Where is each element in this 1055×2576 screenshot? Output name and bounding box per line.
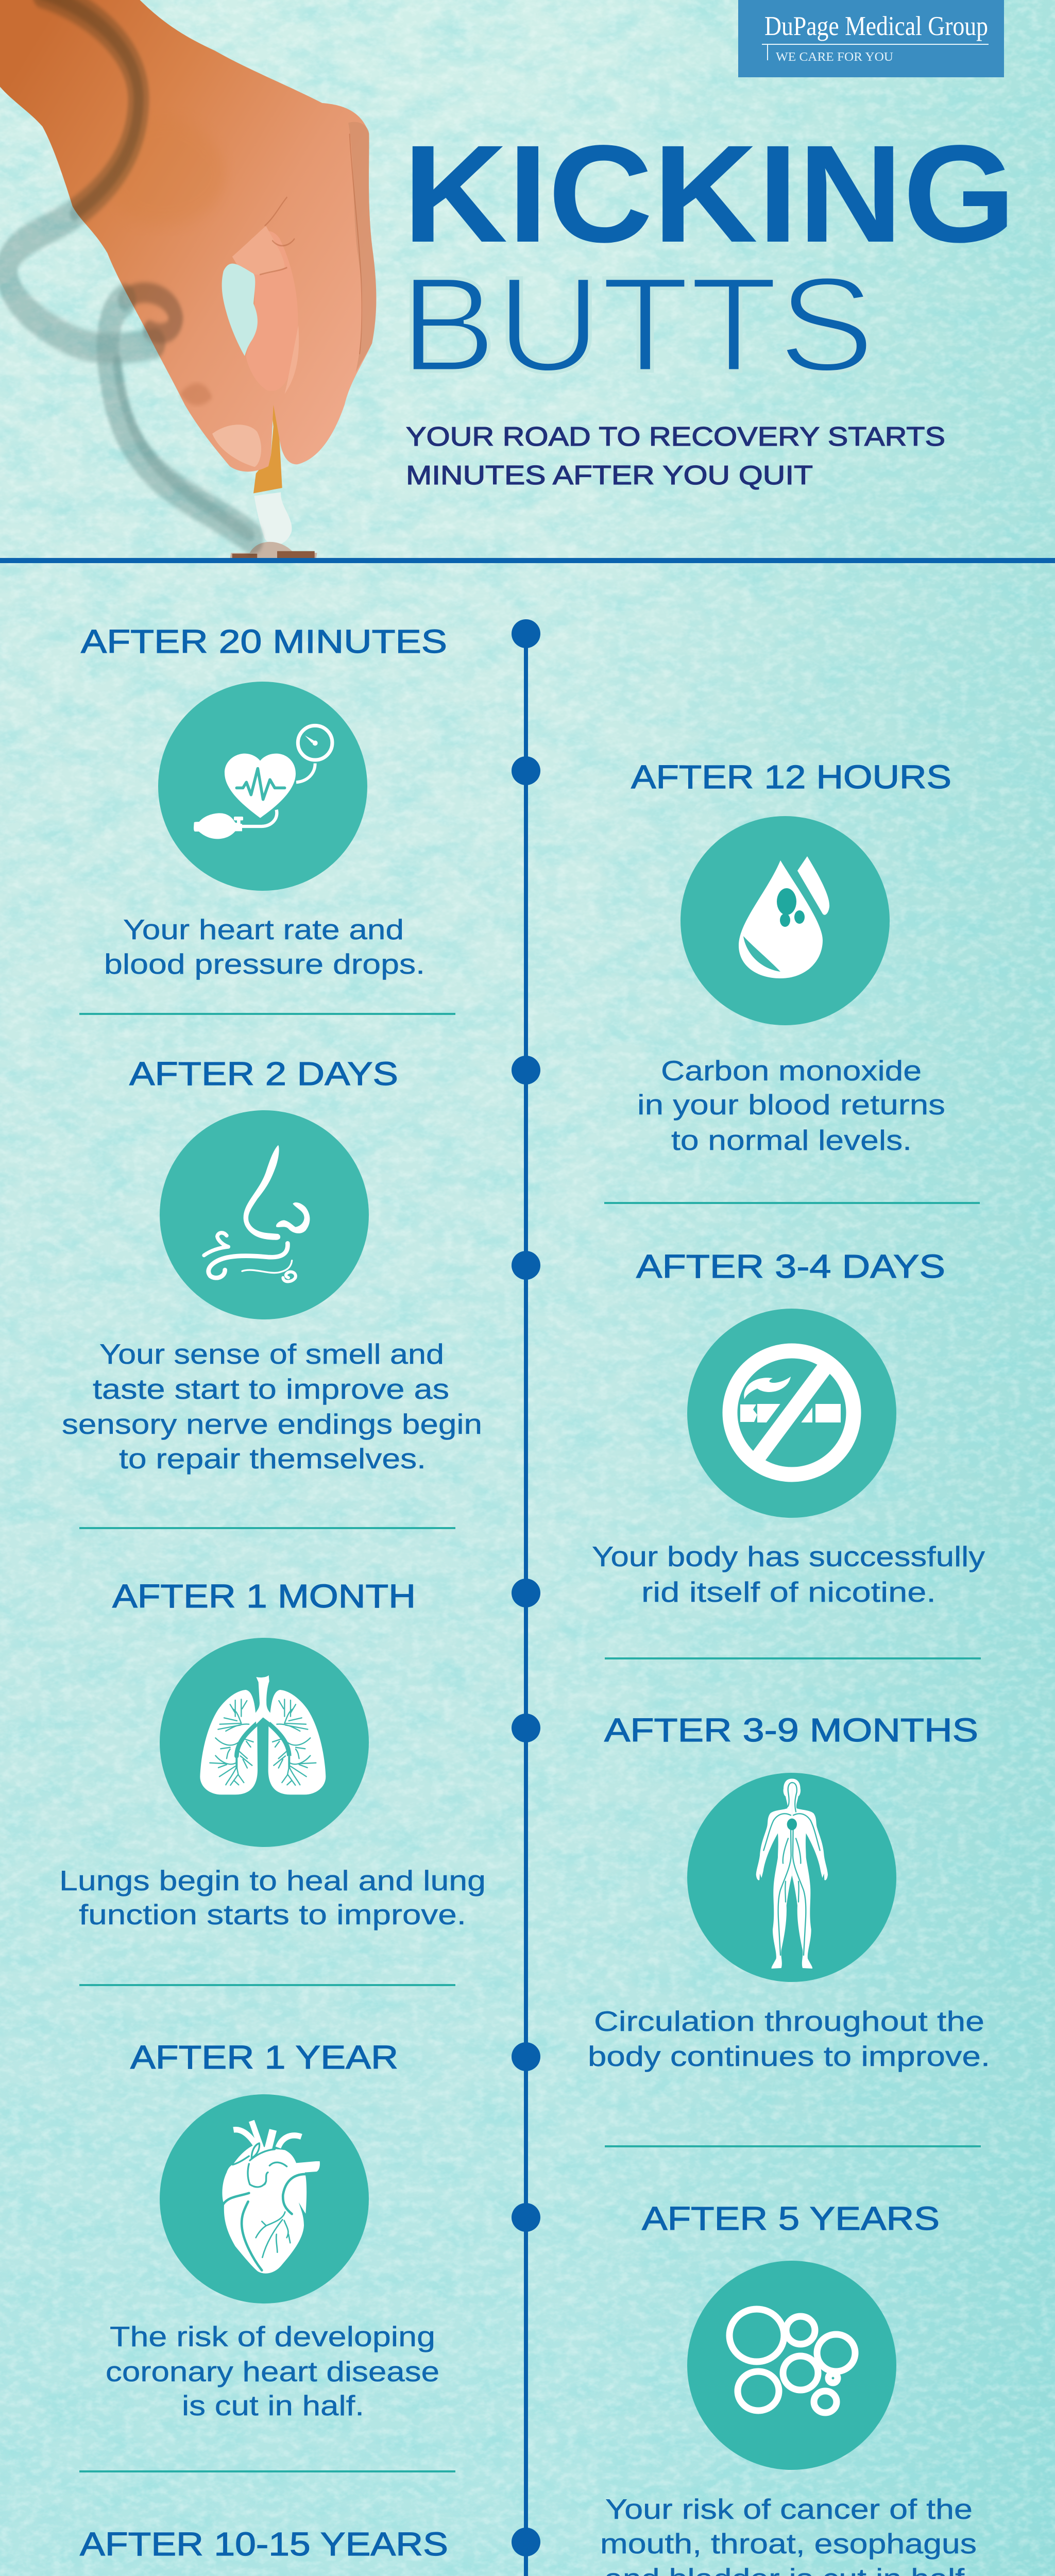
description: [62, 1338, 482, 1475]
hero panel: [0, 0, 1055, 563]
title: kicking: KICKING: [403, 116, 1016, 272]
description: rid itself of nicotine.: [641, 1576, 936, 1608]
description: Carbon monoxide: [661, 1055, 922, 1087]
description: [588, 2005, 990, 2072]
title: butts: BUTTS: [400, 249, 875, 400]
icon: anatomical heart: [160, 2094, 369, 2303]
description: Your sense of smell and: [99, 1338, 444, 1370]
logo tagline: WE CARE FOR YOU: [776, 50, 893, 64]
heading: AFTER 10-15 YEARS: [80, 2526, 448, 2563]
description: mouth, throat, esophagus: [600, 2528, 977, 2560]
panel: after 2 days: [62, 1055, 482, 1475]
subtitle: YOUR ROAD TO RECOVERY STARTS: [406, 422, 945, 452]
description: coronary heart disease: [106, 2355, 439, 2387]
logo wordmark: DuPage Medical Group: [764, 11, 988, 41]
horizontal rule: [0, 558, 1055, 563]
description: in your blood returns: [637, 1089, 945, 1121]
knuckle wrinkles: [180, 383, 212, 405]
ash pile: [230, 542, 317, 560]
panel: after 1 month: [59, 1578, 486, 1930]
finger shading: [348, 122, 376, 372]
description: blood pressure drops.: [104, 948, 425, 980]
heading: AFTER 3-9 MONTHS: [604, 1711, 978, 1749]
description: is cut in half.: [182, 2389, 364, 2421]
icon: lungs: [160, 1638, 369, 1847]
description: body continues to improve.: [588, 2040, 990, 2072]
icon: human circulatory system: [687, 1773, 896, 1982]
thumbnail: [212, 425, 261, 467]
heading: AFTER 1 MONTH: [112, 1578, 416, 1615]
description: The risk of developing: [110, 2320, 435, 2352]
panel: after 3-4 days: [592, 1248, 985, 1608]
panel: after 3-9 months: [588, 1711, 990, 2072]
hole between thumb and finger: [222, 264, 258, 356]
description: Lungs begin to heal and lung: [59, 1865, 486, 1896]
icon: nose and scent: [160, 1110, 369, 1319]
icon: heart and blood pressure gauge: [158, 682, 367, 891]
logo box: [738, 0, 1004, 77]
subtitle: MINUTES AFTER YOU QUIT: [406, 461, 813, 490]
description: function starts to improve.: [79, 1899, 466, 1930]
panel: after 12 hours: [631, 758, 951, 1156]
heading: AFTER 12 HOURS: [631, 758, 951, 795]
description: to repair themselves.: [119, 1443, 426, 1475]
panel: after 20 minutes: [81, 623, 447, 980]
description: [59, 1865, 486, 1930]
cigarette ash: [254, 492, 292, 545]
description: [104, 913, 425, 980]
subtitle: [406, 422, 945, 490]
description: [600, 2493, 977, 2576]
panel: after 5 years: [600, 2200, 977, 2576]
description: sensory nerve endings begin: [62, 1408, 482, 1440]
heading: AFTER 20 MINUTES: [81, 623, 447, 660]
timeline: [512, 619, 540, 2576]
description: Your body has successfully: [592, 1540, 985, 1572]
icon: water drops: [680, 816, 890, 1025]
description: taste start to improve as: [93, 1373, 449, 1405]
description: [106, 2320, 439, 2421]
smoke trail: [7, 0, 252, 538]
description: [592, 1540, 985, 1608]
description: [637, 1055, 945, 1156]
hand shape: [0, 0, 376, 471]
description: Your risk of cancer of the: [605, 2493, 973, 2525]
icon: cancer cells: [687, 2261, 896, 2470]
heading: AFTER 1 YEAR: [130, 2039, 398, 2076]
heading: AFTER 2 DAYS: [129, 1055, 398, 1092]
hand holding cigarette: [0, 0, 376, 560]
description: Circulation throughout the: [594, 2005, 984, 2037]
heading: AFTER 3-4 DAYS: [636, 1248, 945, 1285]
panel: after 1 year: [106, 2039, 439, 2421]
description: to normal levels.: [671, 1124, 912, 1156]
icon: no smoking: [687, 1309, 896, 1518]
cigarette filter: [253, 396, 283, 494]
heading: AFTER 5 YEARS: [642, 2200, 940, 2237]
description: Your heart rate and: [123, 913, 404, 945]
